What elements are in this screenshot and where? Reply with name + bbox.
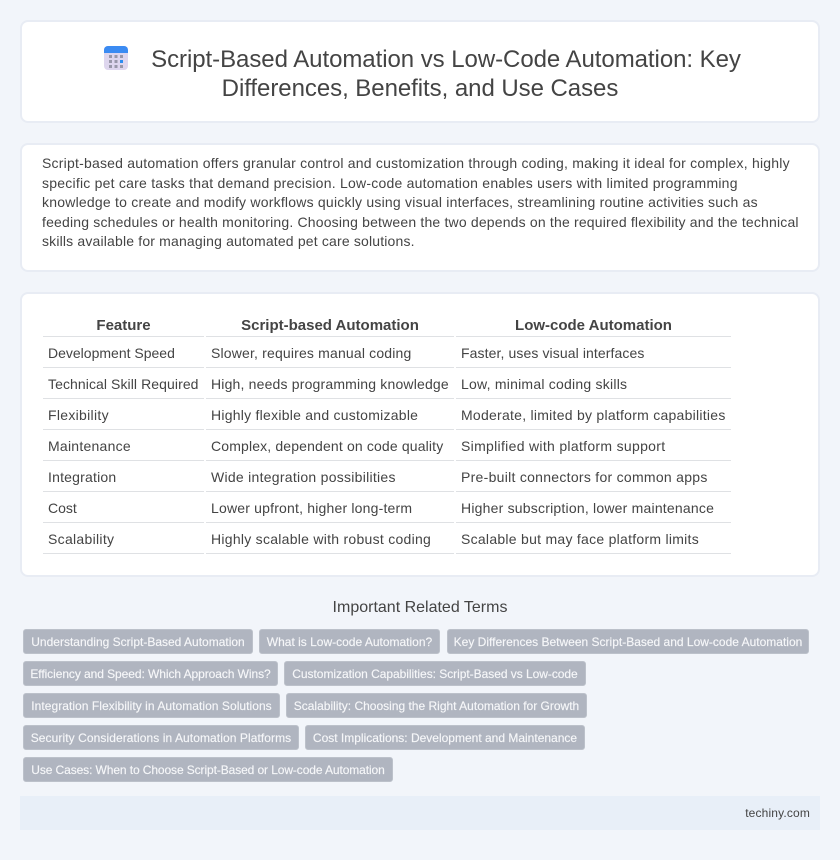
chip (23, 693, 280, 718)
intro paragraph: specific pet care tasks that demand precision. Low-code automation enables users with limited programming (42, 174, 738, 190)
table header: Script-based Automation (241, 317, 419, 334)
chip (23, 757, 393, 782)
chip (284, 661, 586, 686)
chip (259, 629, 440, 654)
table row: flexibility (43, 407, 731, 430)
title: Differences, Benefits, and Use Cases (222, 75, 618, 102)
related terms chips (23, 629, 809, 782)
chip: Scalability: Choosing the Right Automation for Growth (294, 699, 579, 713)
table row: maintenance: Complex, dependent on code quality (211, 438, 443, 454)
table row: integration: Pre-built connectors for common apps (461, 469, 708, 485)
panel: intro text (20, 143, 820, 272)
table row: development speed: Development Speed (48, 345, 175, 361)
icon: calendar (104, 46, 128, 70)
panel: header (20, 20, 820, 123)
table row: scalability: Scalability (48, 531, 114, 547)
table row: technical skill: Low, minimal coding skills (461, 376, 627, 392)
chip: Security Considerations in Automation Platforms (31, 731, 291, 745)
table header (43, 317, 731, 337)
chip: Cost Implications: Development and Maintenance (313, 731, 577, 745)
table row: cost: Higher subscription, lower maintenance (461, 500, 714, 516)
table row: flexibility: Highly flexible and customizable (211, 407, 418, 423)
intro paragraph: Script-based automation offers granular control and customization through coding, making it ideal for complex, highly (42, 155, 790, 171)
table row: integration (43, 469, 731, 492)
panel: comparison table (20, 292, 820, 577)
table row: cost: Cost (48, 500, 77, 516)
chip: Use Cases: When to Choose Script-Based or Low-code Automation (31, 763, 385, 777)
table row: development speed: Faster, uses visual interfaces (461, 345, 645, 361)
table row: cost: Lower upfront, higher long-term (211, 500, 412, 516)
chip (23, 725, 299, 750)
chip (23, 629, 253, 654)
chip (305, 725, 585, 750)
intro paragraph: feeding schedules or health monitoring. Choosing between the two depends on the required flexibility and the technical (42, 214, 799, 230)
table row: technical skill: Technical Skill Required (48, 376, 199, 392)
table row: flexibility: Moderate, limited by platform capabilities (461, 407, 726, 423)
intro paragraph (42, 155, 799, 249)
table row: flexibility: Flexibility (48, 407, 109, 423)
chip: Understanding Script-Based Automation (31, 635, 245, 649)
table row: integration: Wide integration possibilities (211, 469, 396, 485)
table row: cost (43, 500, 731, 523)
chip: Efficiency and Speed: Which Approach Wins? (30, 667, 271, 681)
chip (286, 693, 587, 718)
chip: Key Differences Between Script-Based and Low-code Automation (454, 635, 802, 649)
intro paragraph: skills available for managing automated pet care solutions. (42, 233, 415, 249)
table row: maintenance (43, 438, 731, 461)
table row: integration: Integration (48, 469, 116, 485)
table row: technical skill: High, needs programming knowledge (211, 376, 449, 392)
table row: scalability (43, 531, 731, 554)
table row: maintenance: Simplified with platform support (461, 438, 665, 454)
table row: maintenance: Maintenance (48, 438, 131, 454)
footer source: techiny.com (745, 806, 810, 820)
chip (23, 661, 278, 686)
chip (447, 629, 809, 654)
chip: Customization Capabilities: Script-Based vs Low-code (292, 667, 578, 681)
table row: development speed (43, 345, 731, 368)
chip: Integration Flexibility in Automation Solutions (31, 699, 272, 713)
table row: development speed: Slower, requires manual coding (211, 345, 411, 361)
table row: technical skill (43, 376, 731, 399)
table header: Low-code Automation (515, 317, 672, 334)
chip: What is Low-code Automation? (267, 635, 432, 649)
title (151, 46, 741, 102)
intro paragraph: knowledge to create and modify workflows quickly using visual interfaces, streamlining routine activities such as (42, 194, 758, 210)
title: Script-Based Automation vs Low-Code Automation: Key (151, 46, 741, 73)
footer bar (20, 796, 820, 830)
table row: scalability: Scalable but may face platform limits (461, 531, 699, 547)
heading: important related terms: Important Related Terms (333, 599, 507, 616)
table header: Feature (96, 317, 151, 334)
comparison table (43, 317, 731, 554)
table row: scalability: Highly scalable with robust coding (211, 531, 431, 547)
